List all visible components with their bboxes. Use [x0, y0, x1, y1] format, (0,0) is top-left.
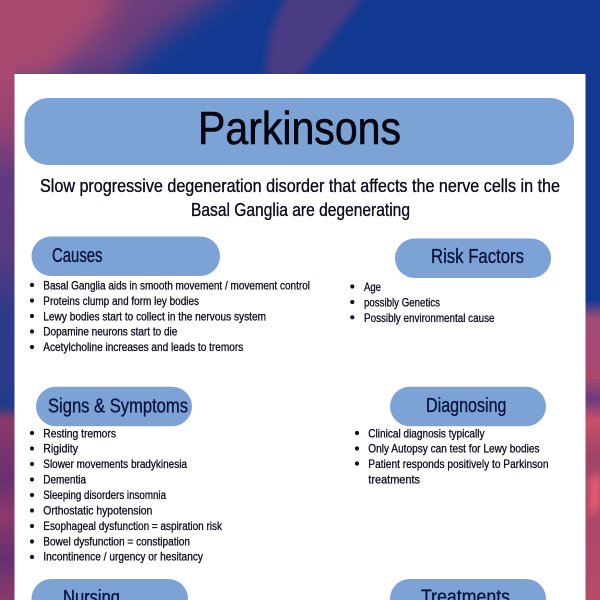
panel: signs and symptoms — [30, 387, 223, 564]
risk factors heading: Risk Factors — [431, 246, 524, 268]
risk factors list: possibly Genetics — [364, 295, 440, 309]
causes list: Lewy bodies start to collect in the nervous system — [43, 309, 266, 323]
signs and symptoms list: Dementia — [43, 472, 86, 486]
subtitle description — [40, 176, 560, 220]
signs and symptoms heading: Signs & Symptoms — [48, 396, 188, 418]
signs and symptoms heading — [36, 387, 192, 426]
diagnosing list: Only Autopsy can test for Lewy bodies — [368, 442, 540, 456]
diagnosing list: Patient responds positively to Parkinson — [368, 457, 548, 471]
causes list: Proteins clump and form ley bodies — [43, 294, 199, 308]
risk factors list — [350, 280, 495, 325]
panel: risk factors — [350, 238, 551, 325]
diagnosing list — [355, 426, 548, 486]
nursing heading — [32, 579, 188, 600]
diagnosing list: treatments — [368, 472, 420, 486]
causes list: Basal Ganglia aids in smooth movement / movement control — [43, 278, 310, 292]
risk factors list: Possibly environmental cause — [364, 311, 495, 325]
signs and symptoms list: Rigidity — [43, 442, 78, 456]
signs and symptoms list: Orthostatic hypotension — [43, 504, 152, 518]
risk factors heading — [395, 238, 551, 278]
panel: diagnosing — [355, 387, 548, 486]
causes list — [30, 278, 310, 354]
causes heading: Causes — [52, 245, 102, 267]
signs and symptoms list: Sleeping disorders insomnia — [43, 488, 166, 502]
subtitle description: Basal Ganglia are degenerating — [191, 200, 410, 220]
diagnosing list: Clinical diagnosis typically — [368, 426, 484, 440]
treatments heading — [390, 579, 546, 600]
panel: causes — [30, 236, 310, 354]
title banner — [24, 98, 574, 165]
signs and symptoms list: Esophageal dysfunction = aspiration risk — [43, 519, 223, 533]
diagnosing heading — [390, 387, 546, 426]
signs and symptoms list: Bowel dysfunction = constipation — [43, 534, 190, 548]
diagnosing heading: Diagnosing — [426, 395, 506, 417]
causes heading — [32, 236, 220, 276]
signs and symptoms list: Slower movements bradykinesia — [43, 457, 187, 471]
title banner: Parkinsons — [198, 102, 401, 154]
causes list: Dopamine neurons start to die — [43, 325, 178, 339]
signs and symptoms list: Resting tremors — [43, 426, 116, 440]
signs and symptoms list: Incontinence / urgency or hesitancy — [43, 550, 203, 564]
risk factors list: Age — [364, 280, 381, 294]
signs and symptoms list — [30, 426, 223, 564]
causes list: Acetylcholine increases and leads to tremors — [43, 340, 243, 354]
